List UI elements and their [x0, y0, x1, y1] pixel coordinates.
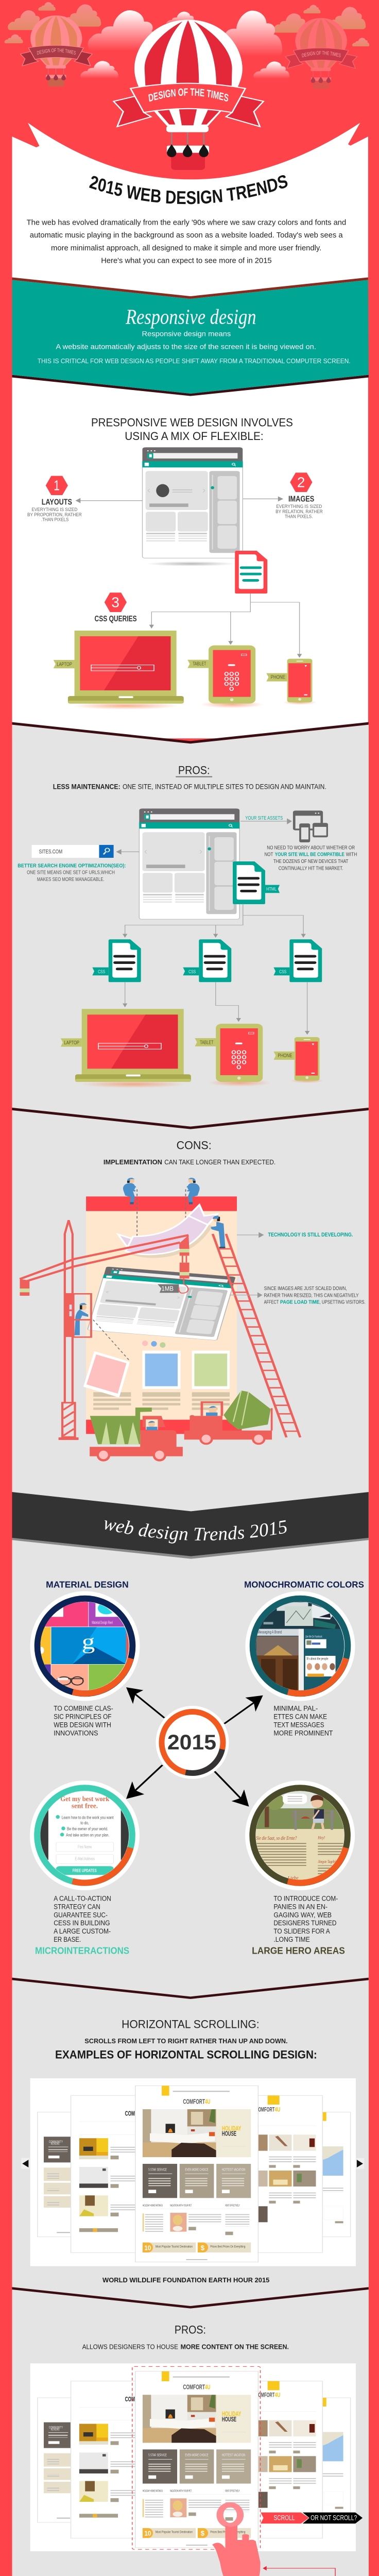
site assets arrow: YOUR SITE ASSETS: [245, 815, 283, 821]
white box: website carousel example: [21, 2078, 364, 2266]
tilted browser: [88, 1266, 236, 1341]
icon: multi device windows: [293, 810, 328, 842]
compatibility text: NOT: [265, 852, 273, 857]
item 1: layouts: BY PROPORTION, RATHER: [27, 513, 82, 517]
website mockups: $: [201, 2530, 204, 2537]
icon: pointing hand: [212, 2505, 261, 2576]
text: large hero areas: PANIES IN AN EN-: [273, 1903, 328, 1911]
website mockups: 4U: [205, 2098, 210, 2106]
text: material design: WEB DESIGN WITH: [54, 1721, 111, 1729]
item 2: images: [243, 472, 323, 519]
implementation text: [104, 1158, 275, 1166]
callout: page load time: [230, 1285, 366, 1305]
text: microinteractions: STRATEGY CAN: [54, 1903, 100, 1911]
right background balloon: [285, 18, 357, 89]
trends heading: [105, 1520, 286, 1544]
website mockups: Most Popular Tourist Destination: [156, 2245, 193, 2248]
pros heading: PROS:: [178, 764, 210, 776]
circle: microinteractions: Learn how to do the work you want: [62, 1815, 114, 1820]
heading: flexible mix: [91, 416, 293, 443]
text: material design: INNOVATIONS: [54, 1729, 98, 1737]
cons heading: CONS:: [177, 1139, 212, 1152]
website mockups: EVEN MORE CHOICE: [185, 2167, 209, 2172]
circle: material design: g: [82, 1630, 95, 1654]
website mockups: COMFORT: [183, 2383, 205, 2391]
text: material design: [54, 1704, 113, 1737]
website mockups: HOTTEST VACATION: [222, 2167, 245, 2172]
browser wireframe: [142, 447, 243, 558]
implementation text: CAN TAKE LONGER THAN EXPECTED.: [164, 1158, 275, 1166]
1mb tag: 1MB: [162, 1285, 174, 1293]
website mockups: RENT EFFECTIVELY: [225, 2204, 240, 2207]
panel: web design trends banner: [12, 1492, 369, 1559]
website mockups: $: [201, 2244, 204, 2252]
text: large hero areas: TO INTRODUCE COM-: [273, 1894, 338, 1903]
compatibility text: WITH: [346, 852, 357, 857]
circle: microinteractions: Get my best work: [60, 1795, 110, 1803]
circle: microinteractions: E-Mail Address: [75, 1857, 95, 1861]
left background balloon: DESIGN OF THE TIMES: [37, 48, 76, 55]
website mockups: EVEN MORE CHOICE: [185, 2453, 209, 2457]
circle: large hero areas: Jüngste Tagebü: [318, 1859, 336, 1864]
devices with css connectors: PHONE: [278, 1053, 292, 1058]
website mockups: HOTTEST VACATION: [222, 2453, 245, 2457]
callout: page load time: AFFECT: [264, 1299, 279, 1305]
website mockups: COMMUNITY: [49, 2140, 63, 2144]
text: microinteractions: CESS IN BUILDING: [54, 1919, 110, 1927]
text: microinteractions: MICROINTERACTIONS: [35, 1945, 129, 1956]
cons of scrolling: [12, 2566, 369, 2576]
website mockups: Prices Best Prices On Everything: [210, 2245, 245, 2248]
flexible mix diagram: [27, 472, 323, 709]
arrows from 2015 badge: [126, 1687, 263, 1807]
trend headings top: MATERIAL DESIGN: [46, 1579, 129, 1590]
icon: html document: HTML: [266, 887, 277, 892]
icon: glasses: [57, 1677, 83, 1685]
circle: microinteractions: First Name: [78, 1845, 92, 1850]
caption and scrolling pros: [12, 2277, 369, 2351]
white box: scrolling example: [30, 2363, 363, 2576]
website mockups: 4U: [274, 2392, 281, 2399]
worker in crane lift: [75, 1303, 88, 1335]
less maintenance text: LESS MAINTENANCE:: [53, 783, 120, 791]
icons: css documents: CSS: [98, 970, 105, 974]
gray content area: [12, 723, 369, 2576]
text: large hero areas: DESIGNERS TURNED: [273, 1919, 336, 1927]
intro text: [27, 218, 346, 265]
text: microinteractions: ER BASE.: [54, 1936, 81, 1943]
circle: monochromatic colors: Messaging A Brand: [257, 1630, 282, 1635]
main hot air balloon: [112, 20, 265, 170]
website mockups: [38, 2086, 351, 2262]
text: material design: SIC PRINCIPLES OF: [54, 1713, 111, 1721]
seo text: MAKES SEO MORE MANAGEABLE.: [37, 876, 105, 882]
website mockups: REVIEWS: [51, 2428, 60, 2431]
text: monochromatic colors: TEXT MESSAGES: [273, 1721, 324, 1729]
circle: monochromatic colors: It's about the people: [306, 1656, 328, 1660]
scroll ribbon: [261, 2513, 363, 2523]
item 1: layouts: 1: [54, 478, 60, 494]
website mockups: OMFORT: [258, 2392, 274, 2399]
ribbon being lifted: [118, 1205, 217, 1258]
pros heading: [176, 764, 212, 777]
circle: monochromatic colors: Like Me On Facebook: [305, 1635, 322, 1638]
website mockups: 5 STAR SERVICE: [148, 2167, 167, 2172]
panel: horizontal scrolling: [12, 1978, 369, 2061]
text: material design: TO COMBINE CLAS-: [54, 1704, 113, 1713]
worker on ladder: [211, 1215, 225, 1248]
pros heading: PROS:: [175, 2324, 206, 2336]
website mockups: REVIEWS: [51, 2142, 60, 2146]
callout: page load time: PAGE LOAD TIME: [280, 1299, 320, 1305]
balloon banner text: DESIGN OF THE TIMES: [148, 88, 229, 102]
dashed scroll viewport: [132, 2366, 261, 2549]
seo text: ONE SITE MEANS ONE SET OF URLS,WHICH: [27, 870, 115, 875]
website mockups: Most Popular Tourist Destination: [156, 2530, 193, 2534]
less maintenance text: [53, 783, 326, 791]
website mockups: HOLIDAY: [222, 2125, 242, 2132]
item 1: layouts: EVERYTHING IS SIZED: [31, 507, 77, 512]
website mockups: Prices Best Prices On Everything: [210, 2530, 245, 2534]
item 2: images: BY RELATION, RATHER: [275, 510, 323, 514]
item 2: images: THAN PIXELS.: [285, 514, 313, 519]
text: monochromatic colors: ETTES CAN MAKE: [273, 1713, 327, 1721]
website mockups: [38, 2371, 351, 2548]
red pointer line: [263, 2566, 335, 2576]
crane: [20, 1220, 190, 1440]
devices with css connectors: TABLET: [200, 1039, 213, 1045]
website mockups: HOLIDAY HOME RATINGS: [143, 2204, 163, 2207]
white page panel: [12, 123, 368, 738]
website mockups: HOLIDAY: [222, 2411, 242, 2418]
text: monochromatic colors: MORE PROMINENT: [273, 1729, 333, 1737]
right background balloon: DESIGN OF THE TIMES: [302, 51, 341, 58]
text: microinteractions: A CALL-TO-ACTION: [54, 1894, 111, 1903]
left background balloon: [20, 15, 93, 87]
website mockups: COM: [125, 2396, 135, 2403]
connectors to css documents: [123, 904, 306, 938]
carousel arrow left: [21, 2158, 29, 2169]
devices: laptop tablet phone: TABLET: [193, 661, 206, 667]
circle: large hero areas: Sie die Saat, so die Ernte?: [256, 1835, 297, 1841]
item 3: css queries: [95, 592, 137, 623]
callout: technology: [237, 1231, 353, 1238]
text: monochromatic colors: MINIMAL PAL-: [273, 1704, 318, 1713]
website mockups: 10: [144, 2530, 151, 2537]
text: large hero areas: TO SLIDERS FOR A: [273, 1927, 330, 1935]
text: large hero areas: [252, 1894, 345, 1956]
text: microinteractions: A LARGE CUSTOM-: [54, 1927, 111, 1935]
definition text: Responsive design means: [142, 330, 231, 338]
icons: css documents: CSS: [188, 970, 196, 974]
item 2: images: EVERYTHING IS SIZED: [277, 504, 322, 509]
circle: microinteractions: FREE UPDATES: [73, 1868, 97, 1873]
circle: microinteractions: [30, 1781, 140, 1890]
circle: large hero areas: Hey!: [318, 1836, 325, 1840]
icon: red css document: [235, 551, 267, 594]
website mockups: VACATION WITH YOUR PET: [170, 2490, 192, 2493]
devices: laptop tablet phone: PHONE: [271, 674, 285, 680]
website mockups: VACATION WITH YOUR PET: [170, 2204, 192, 2207]
website mockups: COM: [125, 2110, 135, 2117]
panel: pros of responsive design: [12, 722, 369, 982]
website mockups: HOUSE: [222, 2416, 236, 2423]
page image cards: [83, 1341, 230, 1410]
trends heading: web design Trends 2015: [105, 1520, 286, 1544]
item 2: images: IMAGES: [288, 495, 314, 503]
website mockups: 4U: [274, 2107, 281, 2113]
website page under construction: [86, 1196, 242, 1434]
1mb tag: [158, 1284, 179, 1293]
example caption: WORLD WILDLIFE FOUNDATION EARTH HOUR 2015: [102, 2277, 269, 2284]
seo text: [18, 862, 126, 882]
search box: SITES.COM: [39, 849, 62, 855]
circle: large hero areas: Liebe: [287, 1876, 299, 1880]
item 1: layouts: LAYOUTS: [42, 498, 72, 506]
website mockups: 5 STAR SERVICE: [148, 2453, 167, 2457]
intro text: Here's what you can expect to see more of in 2015: [101, 257, 272, 265]
website mockups: 4U: [205, 2383, 210, 2391]
connector arrows to devices: [149, 594, 302, 658]
allows designers text: MORE CONTENT ON THE SCREEN.: [181, 2343, 289, 2351]
circle: material design: Material Design Reel: [92, 1620, 113, 1625]
item 1: layouts: .THAN PIXELS: [41, 517, 69, 522]
website mockups: RENT EFFECTIVELY: [225, 2490, 240, 2493]
compatibility text: [265, 844, 357, 871]
website mockups: OMFORT: [258, 2107, 274, 2113]
definition text: [38, 330, 351, 365]
item 3: css queries: 3: [111, 595, 119, 611]
devices: laptop tablet phone: [54, 631, 317, 709]
website mockups: HOLIDAY HOME RATINGS: [143, 2490, 163, 2493]
trend headings top: [46, 1579, 364, 1590]
heading: flexible mix: USING A MIX OF FLEXIBLE:: [125, 430, 264, 443]
devices: laptop tablet phone: LAPTOP: [57, 661, 72, 667]
circle: microinteractions: And take action on your plan.: [66, 1833, 109, 1838]
icons: css documents: [92, 939, 322, 982]
header clouds: [5, 2, 369, 79]
scroll ribbon: SCROLL: [273, 2514, 295, 2522]
text: large hero areas: .LONG TIME: [273, 1936, 310, 1943]
horizontal scrolling heading: HORIZONTAL SCROLLING:: [122, 2018, 260, 2031]
text: monochromatic colors: [273, 1704, 333, 1737]
devices with css connectors: LAPTOP: [64, 1040, 79, 1045]
search box: [31, 845, 139, 858]
website mockups: COMMUNITY: [49, 2426, 63, 2429]
circle: microinteractions: Be the owner of your world.: [67, 1826, 108, 1832]
allows designers text: ALLOWS DESIGNERS TO HOUSE: [82, 2343, 178, 2351]
circle: monochromatic colors: [245, 1591, 355, 1701]
construction scene: [20, 1178, 366, 1462]
center 2015 badge: 2015: [167, 1731, 216, 1754]
website mockups: COMFORT: [183, 2098, 205, 2106]
title: 2015 WEB DESIGN TRENDS: [89, 175, 287, 204]
icon: html document: [233, 861, 280, 904]
devices with css connectors: [12, 982, 369, 1166]
scrolling definition: SCROLLS FROM LEFT TO RIGHT RATHER THAN UP AND DOWN.: [84, 2038, 288, 2045]
text: large hero areas: GAGING WAY, WEB: [273, 1911, 332, 1919]
truck with mixer: [184, 1391, 272, 1445]
circle: large hero areas: [245, 1781, 355, 1890]
circle: microinteractions: to do,: [80, 1821, 89, 1825]
website mockups: 10: [144, 2244, 151, 2252]
item 3: css queries: CSS QUERIES: [95, 615, 137, 623]
text: microinteractions: GUARANTEE SUC-: [54, 1911, 108, 1919]
responsive design heading: Responsive design: [125, 305, 256, 329]
site assets arrow: [240, 815, 292, 824]
seo text: BETTER SEARCH ENGINE OPTIMIZATION(SEO):: [18, 862, 126, 869]
browser wireframe: [139, 808, 239, 919]
carousel arrow right: [356, 2158, 364, 2169]
center 2015 badge: [156, 1706, 229, 1779]
dump truck: [90, 1408, 183, 1462]
panel: responsive design banner: [12, 277, 369, 396]
item 2: images: 2: [297, 474, 305, 490]
text: microinteractions: [35, 1894, 129, 1956]
ladder: [213, 1234, 300, 1437]
circle: microinteractions: sent free.: [72, 1802, 98, 1810]
workers on top of page: [123, 1178, 200, 1204]
website mockups: HOUSE: [222, 2130, 236, 2138]
icons: css documents: CSS: [279, 970, 286, 974]
item 1: layouts: [27, 476, 143, 522]
circle: material design: [30, 1591, 140, 1701]
implementation text: IMPLEMENTATION: [104, 1158, 162, 1166]
